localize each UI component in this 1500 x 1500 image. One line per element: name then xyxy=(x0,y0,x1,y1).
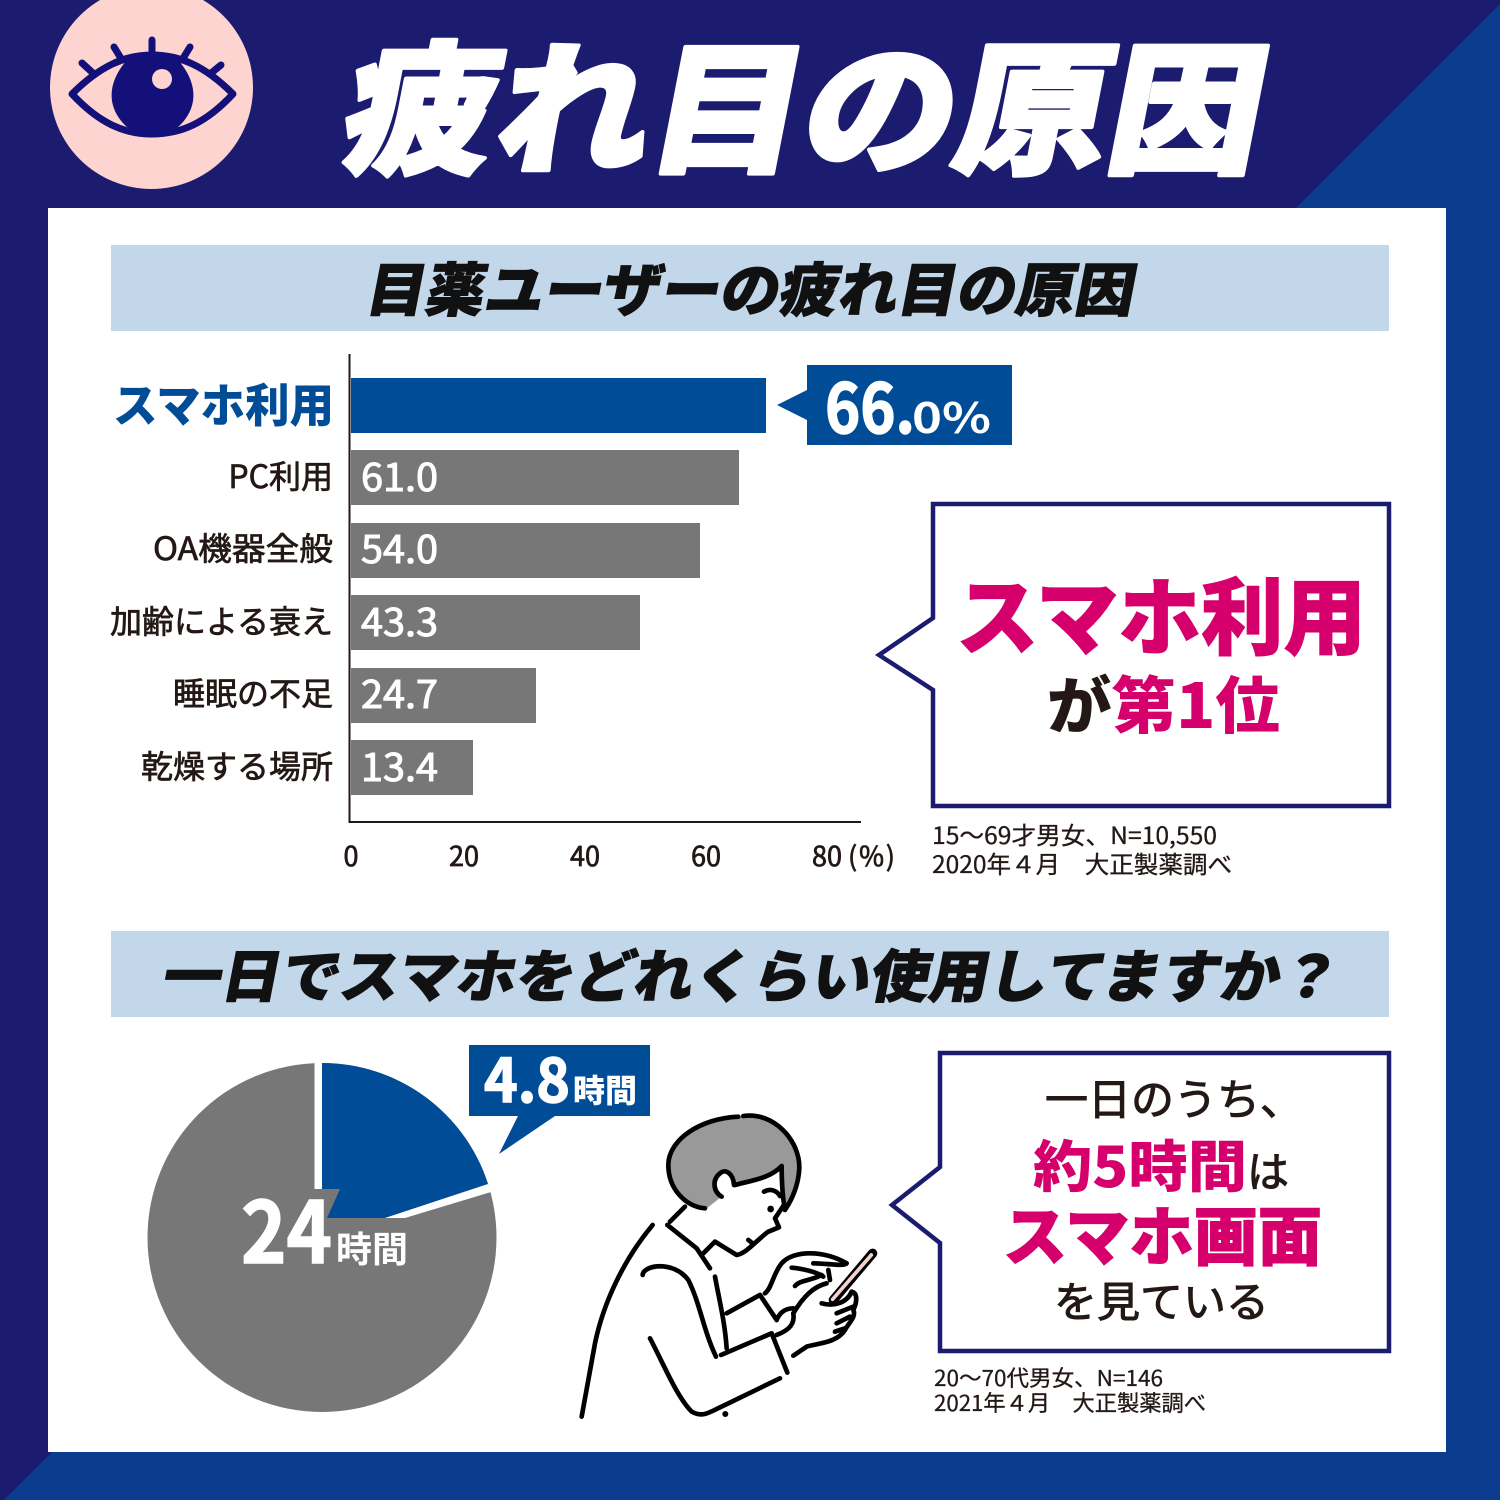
bar: dry places: 乾燥する場所 xyxy=(141,742,333,788)
callout: 4.8 hours: 4.8 xyxy=(484,1033,570,1120)
speech bubble: smartphone use ranks first: が第1位 xyxy=(1047,656,1280,746)
footnote: survey 1: 15〜69才男女、N=10,550 xyxy=(932,816,1217,851)
speech bubble: about 5 hours on smartphone screen: 約5時間 xyxy=(1033,1123,1247,1204)
white content panel xyxy=(48,208,1446,1452)
section heading bar: causes: 目薬ユーザーの疲れ目の原因 xyxy=(361,244,1145,328)
section heading bar: daily usage: 一日でスマホをどれくらい使用してますか？ xyxy=(157,931,1349,1014)
footnote: survey 1 xyxy=(932,816,1232,880)
bar: lack of sleep: 24.7 xyxy=(361,664,438,719)
speech bubble: about 5 hours on smartphone screen: を見ている xyxy=(1054,1269,1269,1330)
speech bubble: about 5 hours on smartphone screen: は xyxy=(1247,1139,1289,1200)
axis labels: 0 xyxy=(344,835,358,874)
speech bubble: about 5 hours on smartphone screen xyxy=(892,1053,1389,1351)
bar: dry places: 13.4 xyxy=(361,737,438,792)
speech bubble: smartphone use ranks first: スマホ利用 xyxy=(956,552,1366,673)
axis labels: 80 xyxy=(812,835,842,874)
pie label: 24 hours: 時間 xyxy=(336,1221,408,1273)
bar: smartphone use: スマホ利用 xyxy=(113,370,334,436)
bar: lack of sleep xyxy=(173,664,536,723)
callout: 4.8 hours: 時間 xyxy=(573,1066,637,1112)
callout: 66.0%: 0% xyxy=(912,385,991,446)
footnote: survey 2 xyxy=(934,1361,1206,1418)
callout: 66.0%: 66. xyxy=(825,354,915,453)
axis labels: (%) xyxy=(848,835,895,874)
pie label: 24 hours: 24 xyxy=(241,1165,332,1288)
bar: PC use: PC利用 xyxy=(228,452,333,498)
bar: OA equipment xyxy=(153,519,700,578)
footnote: survey 2: 2021年４月 大正製薬調べ xyxy=(934,1386,1206,1418)
speech bubble: about 5 hours on smartphone screen: スマホ画面 xyxy=(1003,1187,1322,1279)
bar: smartphone use xyxy=(113,370,766,436)
axis labels: 40 xyxy=(570,835,600,874)
bar: aging xyxy=(110,592,640,650)
bar: aging: 加齢による衰え xyxy=(110,597,333,643)
bar chart: causes of eye strain xyxy=(110,354,895,874)
axis labels: 20 xyxy=(449,835,479,874)
speech bubble: about 5 hours on smartphone screen: 一日のうち、 xyxy=(1045,1066,1303,1128)
axis labels xyxy=(344,835,895,874)
callout: 4.8 hours xyxy=(469,1033,650,1154)
title: 疲れ目の原因 xyxy=(329,0,1287,204)
bar: lack of sleep: 睡眠の不足 xyxy=(173,669,333,715)
bar: OA equipment: OA機器全般 xyxy=(153,524,333,570)
section heading bar: causes xyxy=(111,244,1389,331)
pie chart: 4.8 of 24 hours xyxy=(148,1063,496,1412)
chart axes xyxy=(350,354,861,822)
icon: eye xyxy=(50,0,253,189)
bar: PC use xyxy=(228,447,739,505)
footnote: survey 2: 20〜70代男女、N=146 xyxy=(934,1361,1163,1393)
illustration: person looking at smartphone xyxy=(582,1116,873,1417)
bar: aging: 43.3 xyxy=(361,592,438,647)
pie label: 24 hours xyxy=(241,1165,408,1288)
speech bubble: smartphone use ranks first xyxy=(879,504,1389,806)
footnote: survey 1: 2020年４月 大正製薬調べ xyxy=(932,845,1232,880)
bar: PC use: 61.0 xyxy=(361,447,438,502)
bar: dry places xyxy=(141,737,473,795)
callout: 66.0% xyxy=(777,354,1012,453)
bar: OA equipment: 54.0 xyxy=(361,519,438,574)
axis labels: 60 xyxy=(691,835,721,874)
